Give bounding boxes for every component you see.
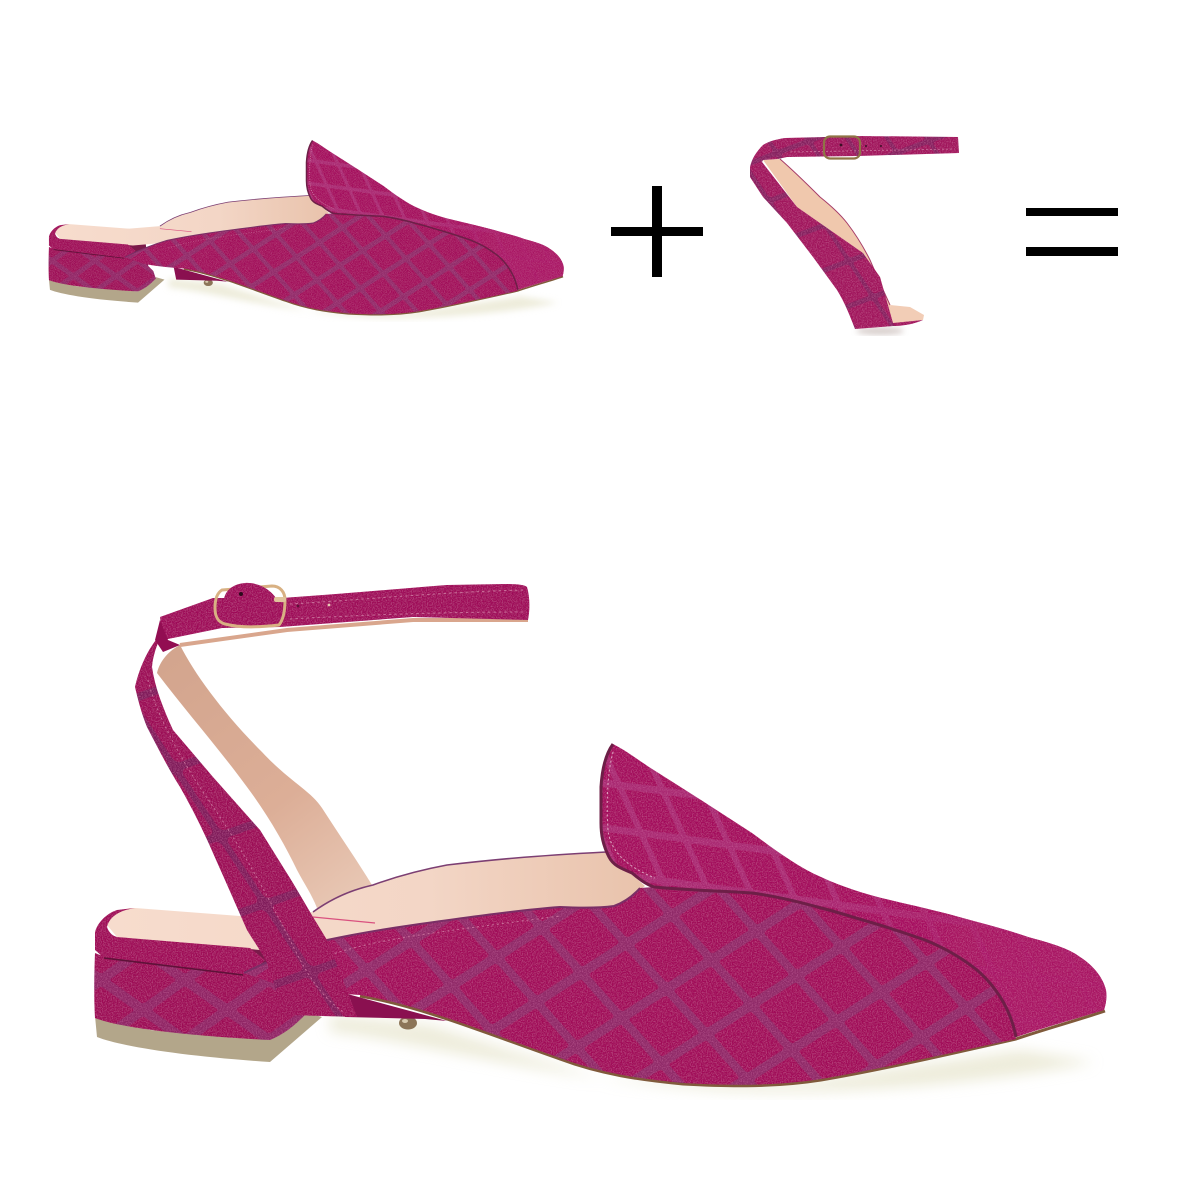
equals sign — [1026, 208, 1118, 256]
strap lining — [157, 645, 372, 908]
detachable ankle strap — [750, 136, 959, 335]
mule base — [94, 744, 1120, 1092]
buckle — [215, 583, 330, 627]
plus sign — [611, 186, 703, 277]
ankle strap — [155, 583, 529, 652]
small mule shoe — [49, 140, 571, 318]
large combined slingback shoe — [94, 583, 1120, 1092]
sling strap — [135, 633, 357, 1017]
